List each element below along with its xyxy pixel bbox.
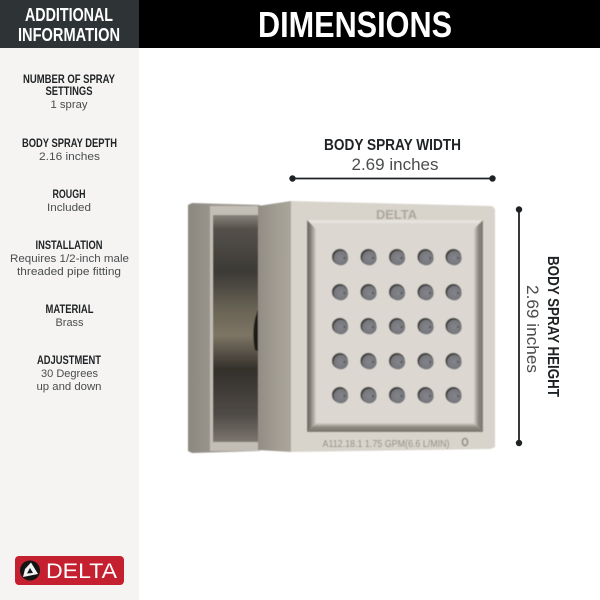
spec: body spray depth: BODY SPRAY DEPTH — [22, 138, 117, 150]
title: dimensions — [139, 0, 600, 48]
delta engraving: DELTA — [376, 207, 418, 222]
logo: delta: DELTA — [46, 560, 117, 583]
spec: material: MATERIAL — [46, 304, 94, 316]
flow rate engraving: A112.18.1 1.75 GPM(6.6 L/MIN) — [322, 438, 450, 450]
spec: adjustment — [36, 355, 102, 393]
spec: number of spray settings: NUMBER OF SPRAY — [23, 74, 115, 86]
spec: rough: Included — [47, 202, 91, 214]
spec: installation — [10, 240, 129, 278]
header: additional information: ADDITIONAL — [25, 5, 113, 25]
dimension: body spray height: BODY SPRAY HEIGHT — [544, 256, 561, 397]
spec: body spray depth — [22, 138, 117, 163]
spray nozzles — [332, 249, 462, 403]
spec: material — [46, 304, 94, 329]
spec: adjustment: up and down — [36, 381, 102, 393]
dimension: body spray width: 2.69 inches — [352, 156, 438, 174]
dimension: body spray width: BODY SPRAY WIDTH — [324, 137, 461, 154]
side of housing — [258, 201, 291, 452]
product: body spray — [188, 201, 495, 453]
spec: rough — [47, 189, 91, 214]
dimension: body spray height — [516, 206, 561, 446]
spec: installation: threaded pipe fitting — [17, 266, 121, 278]
spec: number of spray settings: SETTINGS — [46, 86, 93, 98]
title: dimensions: DIMENSIONS — [258, 4, 452, 45]
dimension: body spray width — [289, 137, 496, 182]
spec: number of spray settings: 1 spray — [50, 99, 88, 111]
wall flange — [188, 203, 260, 453]
panel: additional information sidebar — [0, 48, 139, 600]
spec: rough: ROUGH — [52, 189, 86, 201]
spec: installation: INSTALLATION — [36, 240, 102, 252]
header: additional information — [0, 0, 139, 48]
header: additional information: INFORMATION — [18, 25, 120, 45]
spec: installation: Requires 1/2-inch male — [10, 253, 129, 265]
spec: adjustment: 30 Degrees — [41, 368, 98, 380]
logo: delta — [15, 556, 124, 585]
spec: adjustment: ADJUSTMENT — [37, 355, 101, 367]
dimension: body spray height: 2.69 inches — [523, 285, 541, 373]
spec: material: Brass — [56, 317, 84, 329]
spec: body spray depth: 2.16 inches — [39, 151, 101, 163]
front face — [291, 201, 495, 452]
certification mark — [462, 438, 468, 446]
spec: number of spray settings — [23, 74, 115, 111]
